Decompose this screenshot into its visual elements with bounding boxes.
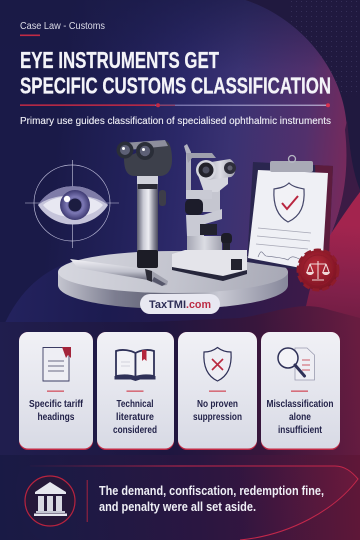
title xyxy=(20,47,331,98)
subtitle: Primary use guides classification of specialised ophthalmic instruments xyxy=(20,115,331,127)
panel: specific tariff headings xyxy=(19,332,93,450)
label: Technical xyxy=(116,399,154,410)
panel: misclassification alone insufficient xyxy=(261,332,340,450)
clipboard with shield xyxy=(247,156,333,278)
label: No proven xyxy=(197,399,238,410)
icon: open book xyxy=(115,350,155,380)
label: insufficient xyxy=(278,425,323,436)
eyebrow accent line xyxy=(20,34,40,36)
label xyxy=(29,399,84,423)
panel: conclusion xyxy=(16,466,358,540)
label: literature xyxy=(116,412,154,423)
icon: shield with cross xyxy=(204,348,231,381)
label: alone xyxy=(289,412,311,423)
brand pill: TaxTMI xyxy=(149,299,186,311)
eyebrow: case law label: Case Law - Customs xyxy=(20,21,105,32)
instrument: handheld ophthalmoscope xyxy=(116,140,172,268)
label: headings xyxy=(38,412,75,423)
label xyxy=(113,399,157,436)
label: Misclassification xyxy=(266,399,334,410)
icon: magnifier on document xyxy=(278,348,314,380)
label: suppression xyxy=(193,412,242,423)
platform xyxy=(58,251,288,309)
label xyxy=(266,399,334,436)
icon: shield check xyxy=(274,183,304,222)
conclusion text: The demand, confiscation, redemption fine, xyxy=(99,484,324,498)
icon: courthouse xyxy=(25,476,75,526)
panel: technical literature xyxy=(97,332,174,450)
instrument: pen torch xyxy=(70,259,168,286)
wax seal with scales xyxy=(298,250,338,290)
icon: eye with crosshair xyxy=(25,160,119,248)
conclusion text: and penalty were all set aside. xyxy=(99,500,256,514)
panel: no proven suppression xyxy=(178,332,257,450)
label: Specific tariff xyxy=(29,399,84,410)
label xyxy=(193,399,242,423)
icon: document xyxy=(43,347,71,381)
conclusion text xyxy=(99,484,324,514)
brand pill: .com xyxy=(186,299,211,311)
title divider xyxy=(20,103,330,107)
instrument: slit lamp xyxy=(172,144,247,281)
brand pill xyxy=(140,294,220,314)
label: considered xyxy=(113,425,157,436)
title: EYE INSTRUMENTS GET xyxy=(20,47,219,73)
